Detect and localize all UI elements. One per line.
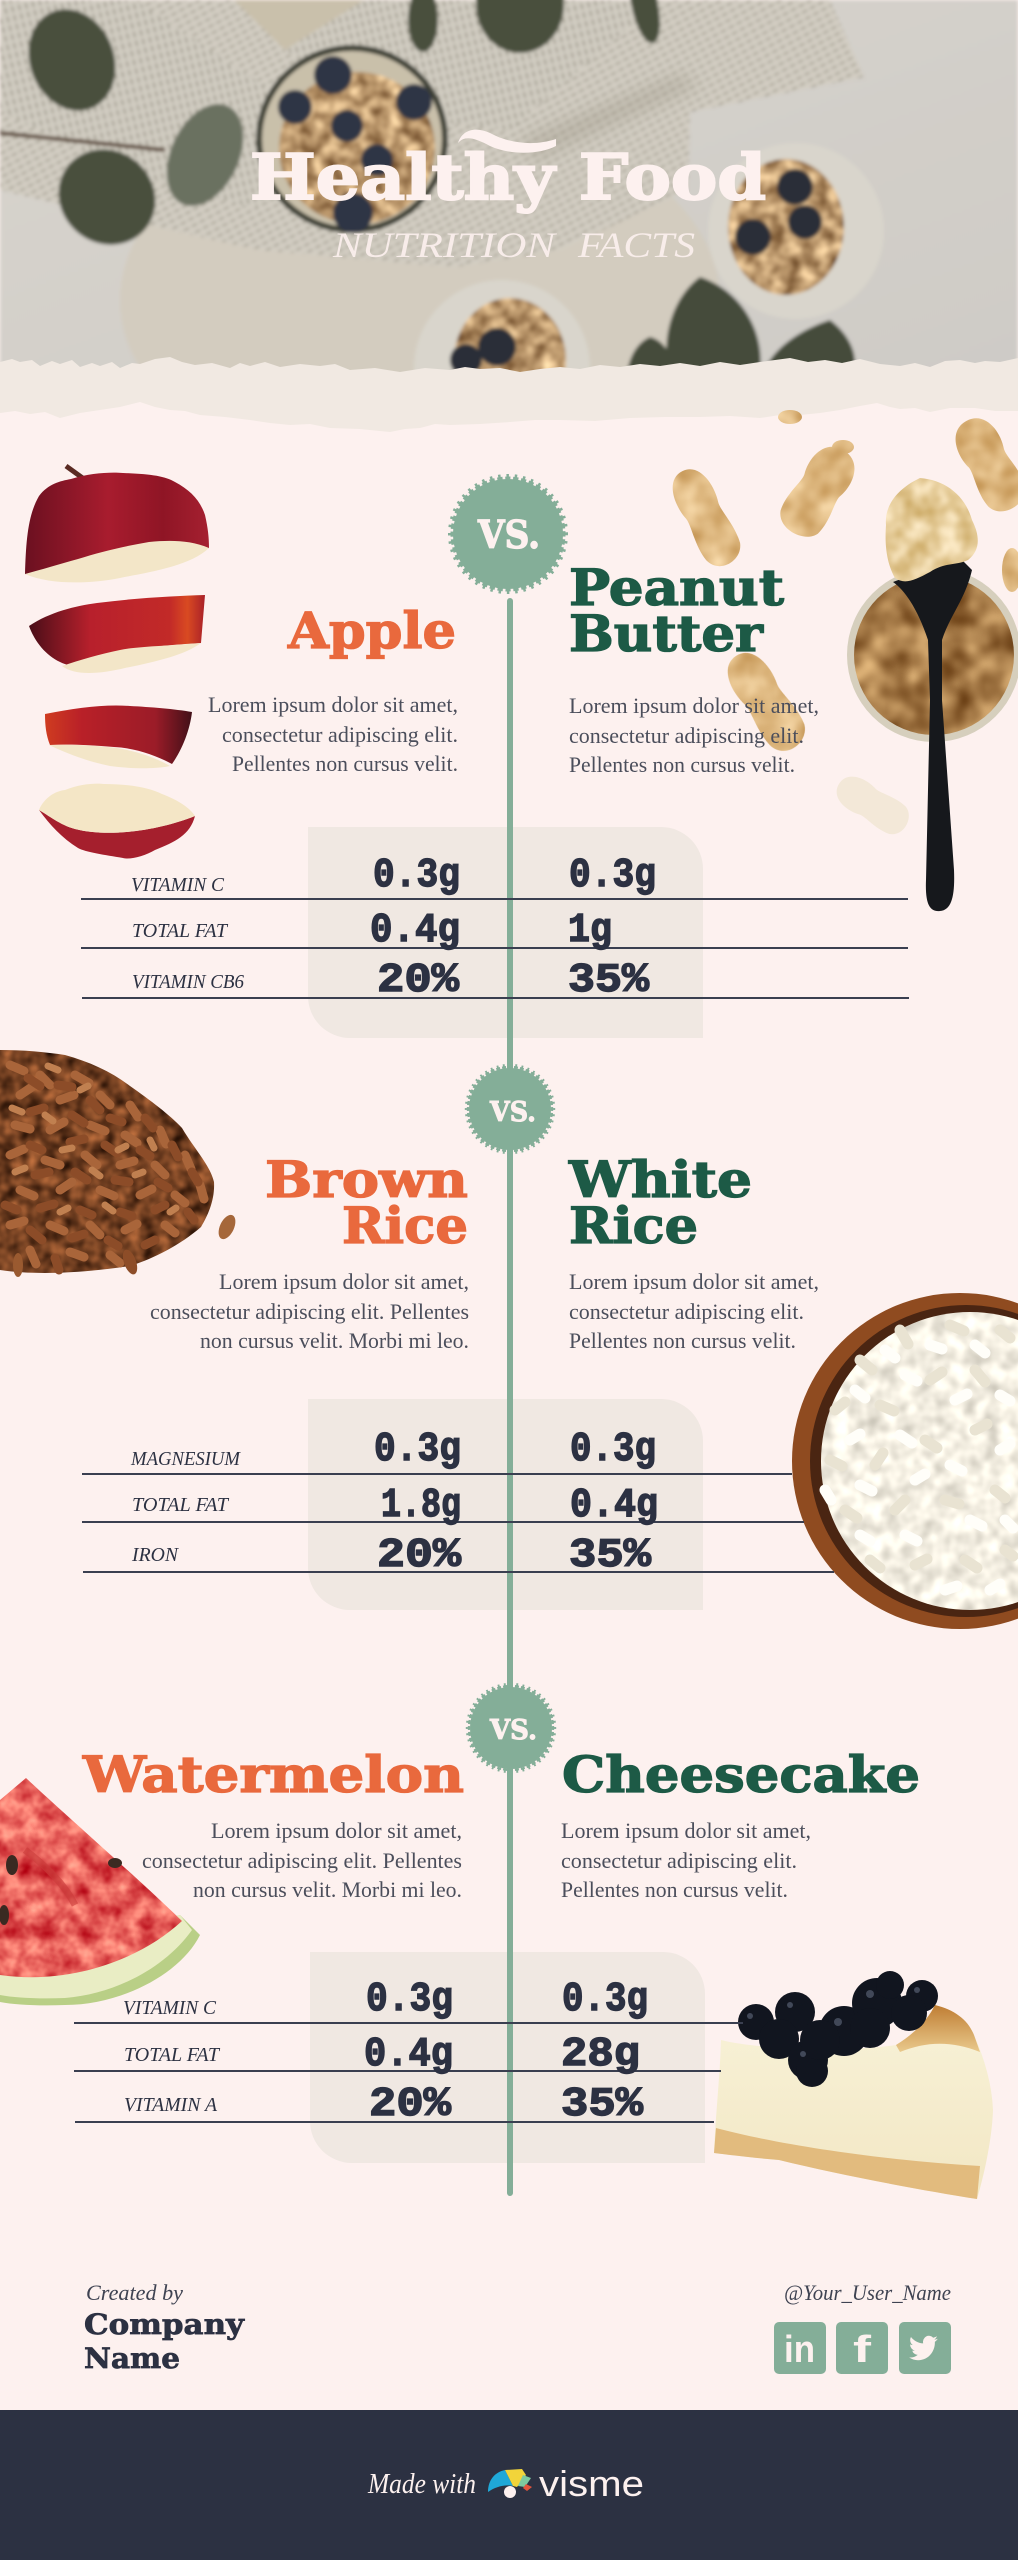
table: nutrition comparison 2: [82, 1427, 834, 1579]
table: nutrition comparison 2: 20%: [377, 1533, 461, 1579]
table: nutrition comparison 1: 0.4g: [370, 908, 460, 954]
subtitle: FACTS: [577, 225, 695, 265]
image: apple slices: [25, 466, 209, 859]
badge: vs: VS.: [477, 512, 540, 557]
table: nutrition comparison 3: 20%: [369, 2082, 451, 2128]
icon: visme logo: [488, 2469, 532, 2498]
image: watermelon slice: [0, 1778, 200, 2005]
title: [250, 130, 766, 265]
text block: brown rice description: Lorem ipsum dolor sit amet,: [219, 1269, 469, 1294]
text block: brown rice description: non cursus velit. Morbi mi leo.: [200, 1328, 469, 1353]
footer: creator credit: [84, 2280, 245, 2375]
text block: apple description: consectetur adipiscing elit.: [222, 722, 458, 747]
icon: facebook: [836, 2322, 888, 2374]
text block: apple description: [208, 692, 458, 776]
social username: @Your_User_Name: [784, 2280, 951, 2305]
panel: table 3 background: [310, 1952, 705, 2163]
table: nutrition comparison 2: MAGNESIUM: [130, 1448, 241, 1470]
text block: brown rice description: [150, 1269, 469, 1353]
table: nutrition comparison 1: 1g: [568, 908, 612, 954]
icon: linkedin: [774, 2322, 826, 2374]
table: nutrition comparison 3: VITAMIN A: [124, 2094, 218, 2116]
table: nutrition comparison 1: VITAMIN C: [131, 874, 225, 896]
subtitle: [332, 225, 695, 265]
text block: cheesecake description: Pellentes non cursus velit.: [561, 1877, 788, 1902]
table: nutrition comparison 3: 0.4g: [364, 2032, 453, 2078]
table: nutrition comparison 2: 35%: [569, 1533, 651, 1579]
torn paper edge band: [0, 357, 1018, 440]
table: nutrition comparison 2: 0.3g: [374, 1427, 461, 1473]
footer: creator credit: Name: [84, 2342, 180, 2375]
heading: brown rice: [265, 1150, 468, 1255]
central divider line: [507, 601, 513, 2193]
heading: peanut butter: Butter: [569, 604, 764, 663]
image: white rice bowl: [792, 1293, 1018, 1629]
subtitle: NUTRITION: [332, 225, 557, 265]
table: nutrition comparison 1: 20%: [377, 958, 459, 1004]
table backgrounds: [308, 827, 705, 2163]
panel: table 2 background: [308, 1399, 703, 1610]
text block: peanut butter description: Lorem ipsum dolor sit amet,: [569, 693, 819, 718]
image: jar of peanut butter with peanuts: [664, 410, 1018, 911]
torn paper page edge: [0, 402, 1018, 470]
icon: twitter: [899, 2322, 951, 2374]
badge: vs: [466, 1065, 554, 1153]
text block: watermelon description: [142, 1818, 462, 1902]
panel: watermelon vs cheesecake: [0, 1684, 993, 2199]
table: nutrition comparison 1: 35%: [568, 958, 649, 1004]
heading: brown rice: Rice: [342, 1196, 468, 1255]
heading: white rice: White: [568, 1150, 752, 1209]
visme wordmark: visme: [539, 2463, 644, 2504]
text block: white rice description: [569, 1269, 819, 1353]
image: blueberry cheesecake: [714, 1971, 993, 2199]
heading: watermelon: Watermelon: [82, 1745, 464, 1804]
table: nutrition comparison 3: TOTAL FAT: [124, 2044, 221, 2066]
footer bar: [0, 2410, 1018, 2560]
image: brown rice pile: [0, 1050, 239, 1277]
badge: vs: [467, 1684, 555, 1772]
heading: white rice: [568, 1150, 752, 1255]
table: nutrition comparison 2: IRON: [131, 1544, 180, 1566]
table: nutrition comparison 2: 1.8g: [381, 1483, 461, 1529]
text block: cheesecake description: consectetur adipiscing elit.: [561, 1848, 797, 1873]
text block: white rice description: Pellentes non cursus velit.: [569, 1328, 796, 1353]
text block: peanut butter description: Pellentes non cursus velit.: [569, 752, 795, 777]
table: nutrition comparison 3: 28g: [561, 2032, 640, 2078]
title text: Healthy Food: [250, 140, 766, 214]
title swash: [458, 130, 556, 153]
heading: brown rice: Brown: [265, 1150, 468, 1209]
heading: peanut butter: [569, 558, 784, 663]
icon: facebook: f: [853, 2329, 871, 2371]
text block: cheesecake description: Lorem ipsum dolor sit amet,: [561, 1818, 811, 1843]
text block: watermelon description: non cursus velit. Morbi mi leo.: [193, 1877, 462, 1902]
table: nutrition comparison 1: TOTAL FAT: [132, 920, 229, 942]
icon: linkedin: in: [784, 2329, 815, 2371]
made with label: Made with: [367, 2469, 476, 2500]
text block: white rice description: Lorem ipsum dolor sit amet,: [569, 1269, 819, 1294]
table: nutrition comparison 1: [81, 853, 909, 1004]
footer: creator credit: Created by: [86, 2280, 183, 2305]
table: nutrition comparison 1: VITAMIN CB6: [132, 971, 244, 993]
table: nutrition comparison 3: 0.3g: [562, 1977, 648, 2023]
text block: apple description: Lorem ipsum dolor sit amet,: [208, 692, 458, 717]
footer: social handle and icons: [774, 2280, 951, 2374]
badge: vs: VS.: [489, 1097, 536, 1128]
text block: apple description: Pellentes non cursus velit.: [232, 751, 458, 776]
text block: watermelon description: Lorem ipsum dolor sit amet,: [211, 1818, 462, 1843]
text block: brown rice description: consectetur adipiscing elit. Pellentes: [150, 1299, 469, 1324]
heading: apple: Apple: [287, 601, 456, 660]
table: nutrition comparison 3: 35%: [561, 2082, 643, 2128]
table: nutrition comparison 2: 0.3g: [570, 1427, 656, 1473]
panel: brown rice vs white rice: [0, 1050, 1018, 1629]
text block: peanut butter description: consectetur adipiscing elit.: [569, 723, 804, 748]
table: nutrition comparison 2: TOTAL FAT: [132, 1494, 230, 1516]
heading: peanut butter: Peanut: [569, 558, 784, 617]
badge: vs: [450, 476, 566, 592]
table: nutrition comparison 3: [74, 1977, 743, 2128]
heading: cheesecake: Cheesecake: [562, 1745, 920, 1804]
footer: creator credit: Company: [84, 2308, 245, 2341]
table: nutrition comparison 3: 0.3g: [366, 1977, 453, 2023]
text block: white rice description: consectetur adipiscing elit.: [569, 1299, 804, 1324]
badge: vs: VS.: [489, 1715, 537, 1746]
text block: cheesecake description: [561, 1818, 811, 1902]
header photo: bowls of granola on a towel: [0, 0, 1018, 372]
table: nutrition comparison 1: 0.3g: [373, 853, 460, 899]
table: nutrition comparison 2: 0.4g: [570, 1483, 658, 1529]
panel: table 1 background: [308, 827, 703, 1038]
panel: apple vs peanut butter: [25, 410, 1018, 1004]
table: nutrition comparison 3: VITAMIN C: [123, 1997, 217, 2019]
text block: watermelon description: consectetur adipiscing elit. Pellentes: [142, 1848, 462, 1873]
text block: peanut butter description: [569, 693, 819, 777]
table: nutrition comparison 1: 0.3g: [569, 853, 656, 899]
heading: white rice: Rice: [569, 1196, 698, 1255]
